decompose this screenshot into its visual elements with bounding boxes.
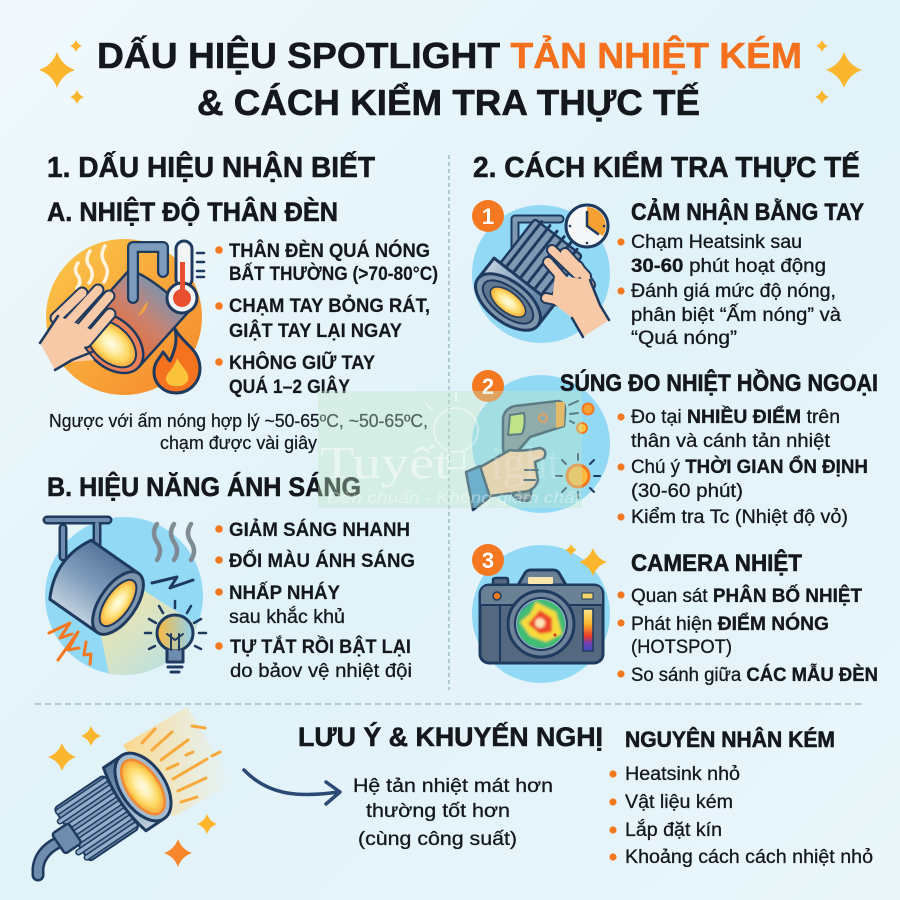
list: method 3: Quan sát PHÂN BỐ NHIỆT <box>631 585 862 607</box>
heading: section 2: 2. CÁCH KIỂM TRA THỰC TẾ <box>473 150 860 184</box>
list: method 2: Chú ý THỜI GIAN ỔN ĐỊNH <box>631 456 868 478</box>
title: DẤU HIỆU SPOTLIGHT TẢN NHIỆT KÉM <box>97 34 802 76</box>
icon: title sparkles <box>39 40 862 104</box>
list: method 2: thân và cánh tản nhiệt <box>631 431 831 452</box>
list: method 2: (30-60 phút) <box>631 481 743 502</box>
panel: lưu ý và khuyến nghị <box>37 707 873 876</box>
list: B bullets: do bảov vệ nhiệt đội <box>230 661 412 682</box>
arrow <box>244 770 340 804</box>
icon: cool spotlight with heatsink <box>37 707 233 876</box>
list: method 2: Kiểm tra Tc (Nhiệt độ vỏ) <box>631 507 848 528</box>
list: B bullets: ĐỔI MÀU ÁNH SÁNG <box>229 548 415 572</box>
icon: degraded spotlight with bulb <box>42 517 206 680</box>
list: method 1: Chạm Heatsink sau <box>631 232 802 253</box>
list: A bullets <box>215 238 438 398</box>
list: A bullets: BẤT THƯỜNG (>70-80°C) <box>229 261 438 285</box>
list: method 1: “Quá nóng” <box>631 328 737 349</box>
note: ấm nóng hợp lý: Ngược với ấm nóng hợp lý ~50-65ºC, ~50-65ºC, <box>49 411 428 431</box>
list: nguyên nhân: Lắp đặt kín <box>625 819 722 841</box>
watermark: ight <box>490 437 560 488</box>
badge: 2: 2 <box>482 374 494 399</box>
list: method 1: phân biệt “Ấm nóng” và <box>631 304 841 326</box>
badge: 1: 1 <box>482 204 494 229</box>
heading: section 1: 1. DẤU HIỆU NHẬN BIẾT <box>47 150 375 184</box>
list: A bullets: KHÔNG GIỮ TAY <box>229 350 375 374</box>
badge: 3 <box>472 544 504 576</box>
list: method 2 <box>617 406 868 528</box>
badge: 1 <box>472 200 504 232</box>
heading: A: A. NHIỆT ĐỘ THÂN ĐÈN <box>47 196 338 227</box>
list: method 3: (HOTSPOT) <box>631 637 732 658</box>
list: A bullets: CHẠM TAY BỎNG RÁT, <box>229 293 430 317</box>
title <box>97 34 802 123</box>
text: khuyến nghị: Hệ tản nhiệt mát hơn <box>353 776 553 797</box>
icon: hand touching heatsink with clock <box>466 205 610 343</box>
badge: 3: 3 <box>482 548 494 573</box>
heading: B: B. HIỆU NĂNG ÁNH SÁNG <box>47 471 361 502</box>
text: khuyến nghị: (cùng công suất) <box>358 829 517 850</box>
list: method 2: Đo tại NHIỀU ĐIỂM trên <box>631 406 840 428</box>
list: B bullets: GIẢM SÁNG NHANH <box>229 518 410 541</box>
panel: dấu hiệu nhận biết <box>40 150 438 682</box>
list: nguyên nhân: Vật liệu kém <box>625 792 733 813</box>
heading: camera nhiệt: CAMERA NHIỆT <box>631 549 802 577</box>
panel: cách kiểm tra thực tế <box>466 150 878 686</box>
list: A bullets: QUÁ 1–2 GIÂY <box>229 374 350 398</box>
icon: hot lamp with hand <box>40 239 204 395</box>
watermark <box>318 391 582 508</box>
text: khuyến nghị <box>353 776 553 850</box>
icon: thermal camera <box>472 544 610 683</box>
note: ấm nóng hợp lý <box>49 411 428 453</box>
heading: lưu ý: LƯU Ý & KHUYẾN NGHỊ <box>298 721 603 752</box>
list: A bullets: GIẬT TAY LẠI NGAY <box>229 318 402 342</box>
list: method 3: So sánh giữa CÁC MẪU ĐÈN <box>631 664 878 686</box>
heading: nguyên nhân kém: NGUYÊN NHÂN KÉM <box>625 727 835 752</box>
list: method 1: Đánh giá mức độ nóng, <box>631 281 836 302</box>
list: method 3: Phát hiện ĐIỂM NÓNG <box>631 613 829 635</box>
watermark: Tuyết <box>320 437 450 488</box>
list: B bullets: sau khắc khủ <box>229 606 345 628</box>
list: B bullets: NHẤP NHÁY <box>229 581 340 604</box>
list: A bullets: THÂN ĐÈN QUÁ NÓNG <box>229 238 430 262</box>
list: nguyên nhân <box>609 764 873 868</box>
list: B bullets <box>215 518 415 682</box>
note: ấm nóng hợp lý: chạm được vài giây <box>160 433 317 453</box>
title: & CÁCH KIỂM TRA THỰC TẾ <box>197 81 700 123</box>
list: nguyên nhân: Heatsink nhỏ <box>625 764 740 785</box>
list: method 3 <box>617 585 878 686</box>
list: nguyên nhân: Khoảng cách cách nhiệt nhỏ <box>625 847 873 868</box>
list: method 1 <box>617 232 841 349</box>
text: khuyến nghị: thường tốt hơn <box>366 801 510 822</box>
list: B bullets: TỰ TẮT RỒI BẬT LẠI <box>230 634 411 658</box>
watermark: Đèn chuẩn - Không giảm chất <box>327 489 581 507</box>
heading: cảm nhận bằng tay: CẢM NHẬN BẰNG TAY <box>631 197 864 226</box>
badge: 2 <box>472 370 504 402</box>
icon: infrared thermometer gun <box>466 375 610 513</box>
list: method 1: 30-60 phút hoạt động <box>631 256 826 277</box>
